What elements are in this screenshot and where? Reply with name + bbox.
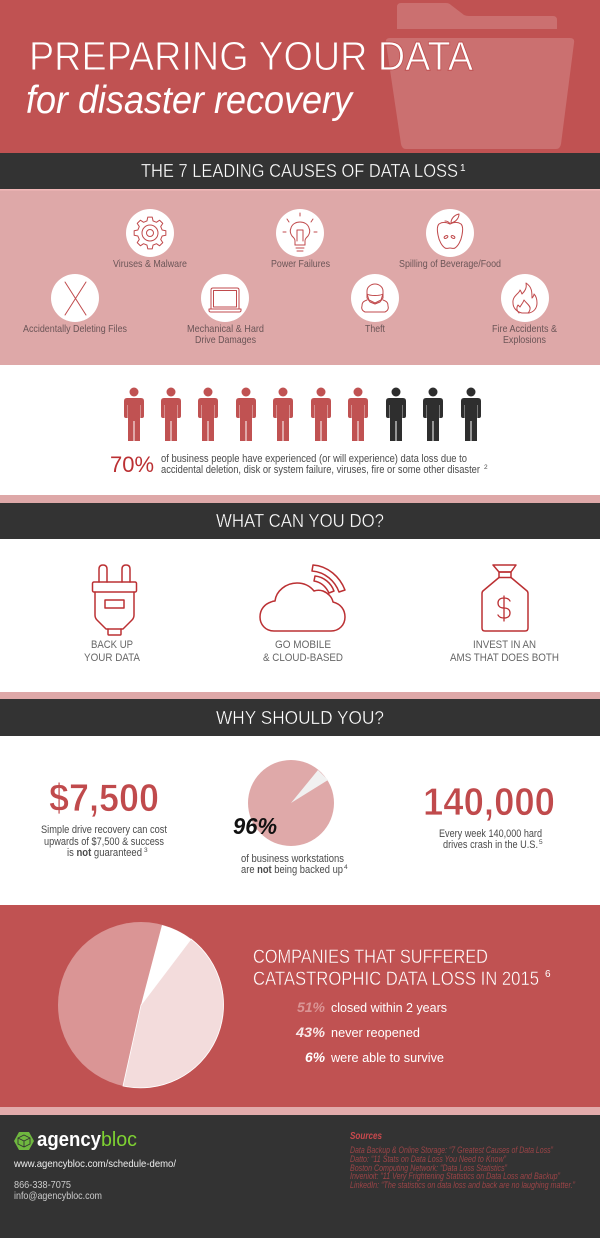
pie chart: company outcomes bbox=[58, 922, 224, 1088]
cause: spilling of beverage or food bbox=[399, 209, 501, 270]
icon: plug bbox=[92, 565, 136, 635]
statistic: 70 percent: 70% bbox=[110, 452, 154, 477]
cause: power failures: Power Failures bbox=[271, 259, 330, 270]
statistic: 140,000 bbox=[423, 781, 555, 851]
footer bbox=[0, 1107, 600, 1238]
logo: bloc bbox=[101, 1129, 137, 1151]
action: invest in an AMS: INVEST IN AN bbox=[473, 639, 536, 651]
section heading: causes: THE 7 LEADING CAUSES OF DATA LOSS bbox=[141, 161, 458, 181]
logo: agency bbox=[37, 1129, 102, 1151]
statistic: 7,500 dollars: $7,500 bbox=[49, 777, 159, 820]
action: back up your data bbox=[84, 565, 141, 664]
cause: fire accidents and explosions: Explosions bbox=[503, 335, 546, 346]
action: go mobile and cloud-based bbox=[260, 565, 345, 664]
statistic: 7,500 dollars bbox=[41, 777, 167, 859]
statistic: 7,500 dollars: Simple drive recovery can cost bbox=[41, 824, 167, 836]
icon: folder bbox=[386, 3, 574, 149]
statistic: 140,000: 5 bbox=[539, 839, 543, 846]
cause: viruses and malware: Viruses & Malware bbox=[113, 259, 187, 270]
section heading: what can you do bbox=[0, 495, 600, 539]
statistic: 7,500 dollars: is not guaranteed bbox=[67, 847, 142, 859]
title: PREPARING YOUR DATA bbox=[29, 33, 474, 79]
cause: power failures bbox=[271, 209, 330, 270]
pie chart: 96 percent: 4 bbox=[344, 864, 348, 871]
legend: 51 percent: closed within 2 years bbox=[331, 1000, 447, 1015]
statistic: 70 percent: of business people have experienced (or will experience) data loss due to bbox=[161, 453, 467, 465]
pie chart: 96 percent: are not being backed up bbox=[241, 864, 343, 876]
statistic: 70 percent: accidental deletion, disk or system failure, viruses, fire or some other disaster bbox=[161, 464, 480, 476]
action: go mobile and cloud-based: & CLOUD-BASED bbox=[263, 652, 343, 664]
section heading: causes bbox=[0, 153, 600, 189]
cause: theft bbox=[351, 274, 399, 335]
cause: mechanical and hard drive damages: Mechanical & Hard bbox=[187, 324, 264, 335]
cause: mechanical and hard drive damages bbox=[187, 274, 264, 346]
statistic: 70 percent bbox=[110, 452, 488, 477]
pictogram: 7 of 10 people bbox=[124, 388, 481, 441]
statistic: 140,000: Every week 140,000 hard bbox=[439, 828, 542, 840]
legend: 43 percent: never reopened bbox=[331, 1025, 420, 1040]
legend: 6 percent: 6% bbox=[305, 1049, 326, 1065]
legend: 43 percent bbox=[295, 1024, 420, 1040]
cause: mechanical and hard drive damages: Drive Damages bbox=[195, 335, 256, 346]
action: invest in an AMS: AMS THAT DOES BOTH bbox=[450, 652, 559, 664]
panel: causes of data loss bbox=[0, 189, 600, 365]
person icons dark bbox=[386, 388, 481, 441]
legend: 51 percent: 51% bbox=[297, 999, 326, 1015]
pie chart: 96 percent bbox=[233, 760, 348, 876]
legend: 43 percent: 43% bbox=[295, 1024, 326, 1040]
section heading: what can you do: WHAT CAN YOU DO? bbox=[216, 511, 384, 531]
cause: fire accidents and explosions: Fire Accidents & bbox=[492, 324, 557, 335]
panel: catastrophic data loss bbox=[0, 905, 600, 1107]
cause: theft: Theft bbox=[365, 324, 385, 335]
statistic: 70 percent: 2 bbox=[484, 464, 488, 471]
statistic: 7,500 dollars: upwards of $7,500 & success bbox=[44, 836, 164, 848]
panel: catastrophic data loss: 6 bbox=[545, 969, 551, 980]
action: back up your data: YOUR DATA bbox=[84, 652, 141, 664]
subtitle: for disaster recovery bbox=[26, 79, 354, 122]
statistic: 140,000: drives crash in the U.S. bbox=[443, 839, 538, 851]
contact details bbox=[13, 1158, 176, 1202]
icon: money bag bbox=[482, 565, 528, 631]
pie chart: 96 percent: of business workstations bbox=[241, 853, 344, 865]
contact details: www.agencybloc.com/schedule-demo/ bbox=[13, 1158, 176, 1170]
action: back up your data: BACK UP bbox=[91, 639, 133, 651]
sources bbox=[350, 1131, 576, 1191]
legend: 6 percent: were able to survive bbox=[330, 1050, 444, 1065]
header banner bbox=[0, 0, 600, 153]
label: 96%: 96% bbox=[233, 813, 277, 839]
cause: accidentally deleting files: Accidentally Deleting Files bbox=[23, 324, 127, 335]
statistic: 140,000: 140,000 bbox=[423, 781, 555, 824]
person icons red bbox=[124, 388, 368, 441]
section heading: why should you: WHY SHOULD YOU? bbox=[216, 708, 384, 728]
cause: fire accidents and explosions bbox=[492, 274, 557, 346]
contact details: 866-338-7075 bbox=[14, 1179, 71, 1191]
action: go mobile and cloud-based: GO MOBILE bbox=[275, 639, 331, 651]
statistic: 7,500 dollars: 3 bbox=[144, 847, 148, 854]
icon: cloud with signal bbox=[260, 565, 345, 631]
contact details: info@agencybloc.com bbox=[14, 1190, 102, 1202]
cause: accidentally deleting files bbox=[23, 274, 127, 335]
section heading: why should you bbox=[0, 692, 600, 736]
logo bbox=[14, 1129, 137, 1151]
heading: COMPANIES THAT SUFFERED bbox=[253, 947, 488, 968]
sources: Sources bbox=[350, 1131, 382, 1142]
panel: catastrophic data loss: CATASTROPHIC DATA LOSS IN 2015 bbox=[253, 969, 539, 990]
cause: viruses and malware bbox=[113, 209, 187, 270]
cause: spilling of beverage or food: Spilling of Beverage/Food bbox=[399, 259, 501, 270]
section heading: causes: 1 bbox=[460, 163, 466, 174]
sources: Boston Computing Network: “Data Loss Statistics” bbox=[350, 1163, 508, 1174]
action: invest in an AMS bbox=[450, 565, 559, 664]
sources: Datto: “11 Stats on Data Loss You Need to Know” bbox=[350, 1154, 507, 1165]
